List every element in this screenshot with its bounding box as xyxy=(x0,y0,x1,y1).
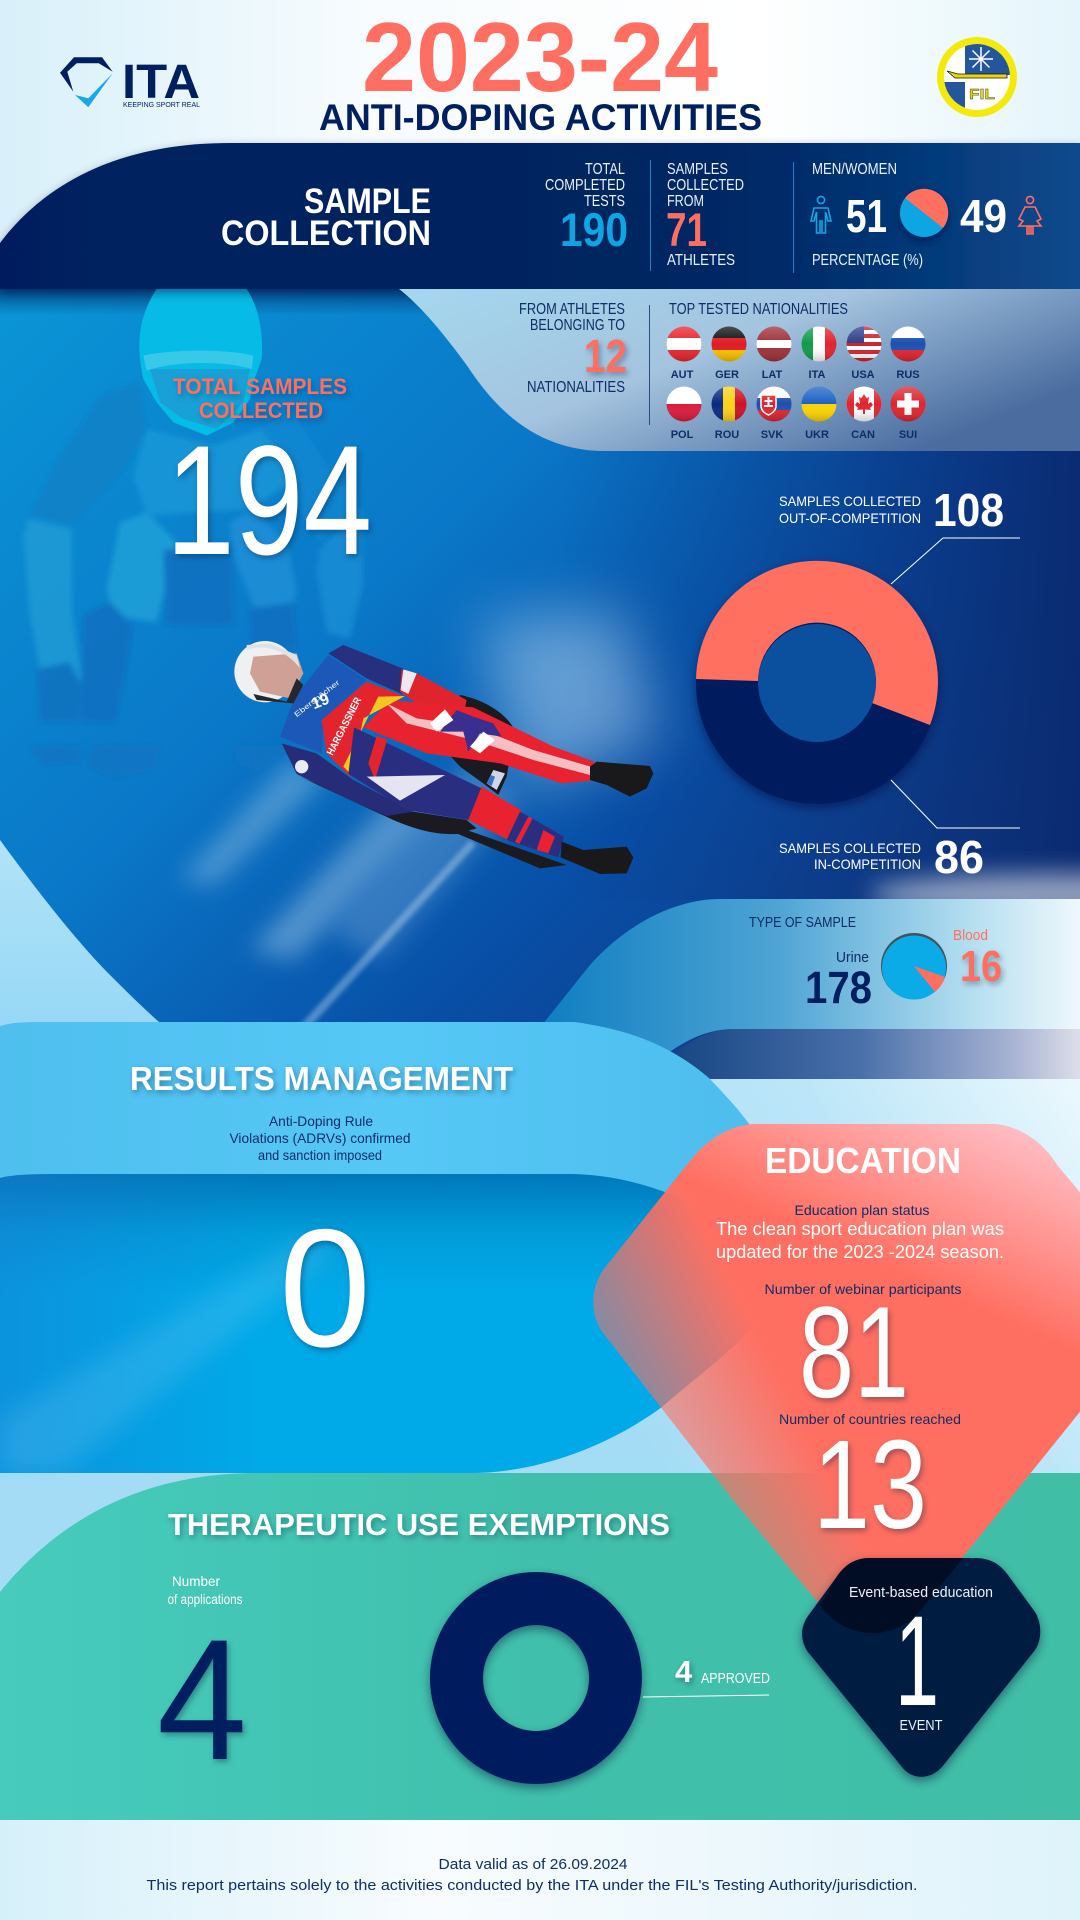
stat: men / women xyxy=(811,161,1041,269)
stat: samples collected from athletes xyxy=(666,161,744,269)
stat: men / women: MEN/WOMEN xyxy=(812,161,897,178)
helmet and face xyxy=(234,641,296,702)
heading: education: EDUCATION xyxy=(765,1140,961,1181)
stat: men / women: PERCENTAGE (%) xyxy=(812,252,923,269)
flag: Russia xyxy=(890,326,926,362)
text: education plan status: The clean sport education plan was xyxy=(716,1219,1004,1239)
sled xyxy=(300,695,567,868)
footer note xyxy=(146,1856,918,1894)
flag labels: USA xyxy=(851,369,875,381)
flag: Romania xyxy=(711,386,747,422)
flag: Switzerland xyxy=(890,386,926,422)
panel: education xyxy=(593,1124,1080,1633)
donut chart xyxy=(696,561,938,804)
flag: Austria xyxy=(666,326,702,362)
panel: nationalities xyxy=(399,289,1080,451)
stat: total samples collected xyxy=(166,374,372,588)
flag: Slovakia xyxy=(756,386,792,422)
flag: Canada xyxy=(846,386,882,422)
shoes xyxy=(561,762,653,874)
heading: sample collection: COLLECTION xyxy=(221,214,431,253)
near arm xyxy=(282,743,413,816)
title: 2023-24 xyxy=(362,2,718,112)
donut chart: approved xyxy=(430,1572,642,1784)
stat: nationalities count: NATIONALITIES xyxy=(527,379,625,396)
stat: countries reached: Number of countries reached xyxy=(779,1411,961,1427)
label: in competition xyxy=(779,780,1020,883)
text: education plan status: updated for the 2023 -2024 season. xyxy=(716,1242,1004,1262)
icon: ITA gem xyxy=(60,57,113,107)
footer note: This report pertains solely to the activities conducted by the ITA under the FIL's Testing Authority/jurisdiction. xyxy=(146,1877,918,1894)
hero background xyxy=(0,289,1080,1078)
panel: type of sample xyxy=(530,899,1080,1065)
stat: number of applications: of applications xyxy=(168,1591,242,1607)
heading: top tested nationalities: TOP TESTED NATIONALITIES xyxy=(669,301,848,318)
label: out of competition xyxy=(779,484,1020,584)
panel: results management xyxy=(0,1022,790,1473)
flag labels: POL xyxy=(671,429,694,441)
label: in competition: IN-COMPETITION xyxy=(814,856,921,872)
label: out of competition: OUT-OF-COMPETITION xyxy=(779,510,921,526)
title: ANTI-DOPING ACTIVITIES xyxy=(319,97,762,138)
ITA logo: ITA xyxy=(122,56,200,109)
dark band below type of sample xyxy=(640,1029,1080,1079)
stat: samples collected from athletes: SAMPLES xyxy=(667,161,728,178)
icon: snowflake xyxy=(969,47,993,71)
flag: Latvia xyxy=(756,326,792,362)
ghost athlete helmet xyxy=(139,289,262,436)
stat: number of applications: 4 xyxy=(157,1604,247,1796)
heading: sample collection: SAMPLE xyxy=(304,182,431,221)
stat: samples collected from athletes: ATHLETES xyxy=(667,252,735,269)
ITA logo: KEEPING SPORT REAL xyxy=(123,100,200,109)
flag labels: SUI xyxy=(899,429,917,441)
pie: men women split xyxy=(900,189,948,237)
stat: ADRV count: 0 xyxy=(279,1194,371,1382)
text: ADRV description: Anti-Doping Rule xyxy=(269,1113,373,1129)
stat: total completed tests xyxy=(545,161,628,256)
title xyxy=(319,2,762,138)
stat: approved xyxy=(643,1654,770,1697)
upper arm xyxy=(328,645,405,694)
FIL logo xyxy=(937,37,1017,117)
label: out of competition: 108 xyxy=(933,484,1004,536)
stat: total completed tests: TESTS xyxy=(584,193,625,210)
FIL logo: FIL xyxy=(969,86,995,103)
header background xyxy=(0,0,1080,300)
heading: type of sample: TYPE OF SAMPLE xyxy=(749,915,856,931)
label: event-based education: Event-based education xyxy=(849,1585,993,1601)
athlete on luge: HARGASSNER xyxy=(326,696,364,757)
flag labels: SVK xyxy=(761,429,783,441)
stat: samples collected from athletes: COLLECTED xyxy=(667,177,744,194)
stat: approved: APPROVED xyxy=(701,1671,770,1687)
stat: total samples collected: TOTAL SAMPLES xyxy=(173,374,347,399)
text: ADRV description xyxy=(230,1113,410,1163)
heading: results management: RESULTS MANAGEMENT xyxy=(130,1060,513,1097)
label: in competition: 86 xyxy=(934,831,984,883)
stat: countries reached: 13 xyxy=(813,1414,927,1555)
text: ADRV description: and sanction imposed xyxy=(258,1147,382,1163)
stat: urine: 178 xyxy=(805,962,872,1013)
text: education plan status: Education plan status xyxy=(794,1202,930,1218)
stat: approved: 4 xyxy=(675,1654,693,1689)
stat: nationalities count: FROM ATHLETES xyxy=(519,301,625,318)
icon: sled xyxy=(947,71,1007,78)
stat: nationalities count xyxy=(519,301,627,396)
stat: samples collected from athletes: FROM xyxy=(667,193,704,210)
flag labels xyxy=(671,369,920,441)
athlete on luge: Eberspächer xyxy=(292,678,342,719)
flag: Poland xyxy=(666,386,702,422)
stat: nationalities count: BELONGING TO xyxy=(530,317,625,334)
bib text: 19 xyxy=(309,691,332,713)
flag labels: ITA xyxy=(809,369,826,381)
athlete on luge xyxy=(234,641,653,874)
label: out of competition: SAMPLES COLLECTED xyxy=(779,493,921,509)
flag: Germany xyxy=(711,326,747,362)
stat: total samples collected: COLLECTED xyxy=(199,398,323,423)
star emblem xyxy=(440,710,502,752)
stat: event count: 1 xyxy=(895,1590,939,1733)
stat: number of applications: Number xyxy=(172,1573,220,1589)
label: in competition: SAMPLES COLLECTED xyxy=(779,840,921,856)
stat: total samples collected: 194 xyxy=(166,414,372,588)
flag labels: LAT xyxy=(762,369,783,381)
heading: therapeutic use exemptions: THERAPEUTIC USE EXEMPTIONS xyxy=(168,1507,670,1542)
icon: man xyxy=(811,196,831,233)
rear leg xyxy=(348,727,482,820)
light area left of hero xyxy=(0,820,240,1060)
panel: therapeutic use exemptions xyxy=(0,1473,1080,1820)
flag: Ukraine xyxy=(801,386,837,422)
stat: men / women: 51 xyxy=(846,190,887,242)
text: education plan status xyxy=(716,1202,1004,1262)
stat: samples collected from athletes: 71 xyxy=(666,203,707,256)
panel: event-based education xyxy=(802,1558,1040,1777)
footer note: Data valid as of 26.09.2024 xyxy=(438,1856,628,1873)
stat: total completed tests: 190 xyxy=(560,203,628,256)
stat: webinar participants: 81 xyxy=(799,1279,909,1425)
front leg xyxy=(363,700,594,783)
label: event: EVENT xyxy=(900,1717,942,1734)
ITA logo xyxy=(60,56,200,109)
stat: urine: Urine xyxy=(836,949,869,966)
stat: total completed tests: COMPLETED xyxy=(545,177,625,194)
flag labels: CAN xyxy=(851,429,875,441)
heading: sample collection xyxy=(221,182,431,253)
icon: woman xyxy=(1019,196,1041,234)
flag: USA xyxy=(846,326,882,362)
stat: webinar participants: Number of webinar participants xyxy=(764,1281,962,1297)
text: ADRV description: Violations (ADRVs) confirmed xyxy=(230,1130,410,1146)
stat: total completed tests: TOTAL xyxy=(585,161,625,178)
flag labels: GER xyxy=(715,369,739,381)
ghost athlete silhouette xyxy=(23,382,363,779)
stat: men / women: 49 xyxy=(960,190,1007,242)
stat: blood: Blood xyxy=(953,927,988,944)
torso xyxy=(280,655,367,753)
header band: sample collection xyxy=(0,143,1080,289)
flag labels: RUS xyxy=(896,369,920,381)
chart: out-of-competition vs in-competition donut xyxy=(696,484,1020,883)
stat: blood: 16 xyxy=(960,942,1002,991)
flag: Italy xyxy=(801,326,837,362)
sash xyxy=(322,682,405,777)
stat: blood xyxy=(953,927,1002,991)
pie chart: sample type xyxy=(881,933,947,1000)
stat: nationalities count: 12 xyxy=(584,330,627,382)
flag labels: UKR xyxy=(805,429,829,441)
flag labels: ROU xyxy=(715,429,739,441)
flag labels: AUT xyxy=(671,369,694,381)
footer xyxy=(0,1820,1080,1920)
